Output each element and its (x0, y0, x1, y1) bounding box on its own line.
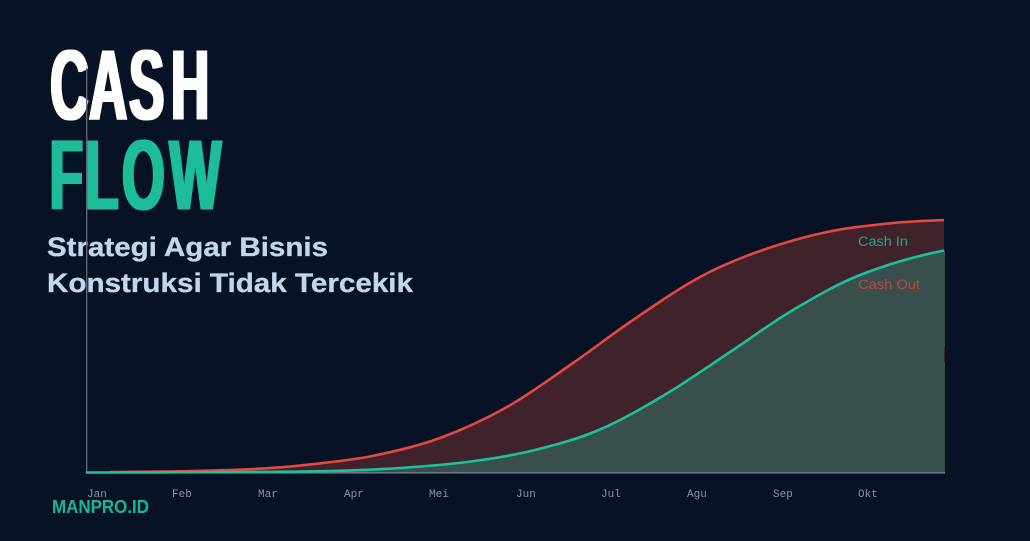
marker: red tick (944, 347, 945, 362)
label: Cash Out: Cash Out (858, 277, 920, 292)
area: cash out (86, 220, 944, 473)
x axis month labels: Jan (87, 489, 107, 501)
x axis month labels: Feb (172, 489, 192, 501)
line: cash in (86, 250, 944, 472)
x axis month labels: Jul (601, 489, 621, 501)
title: Cash Flow: CASH (50, 30, 209, 141)
y axis (86, 68, 87, 473)
logo: MANPRO.ID: MANPRO.ID (52, 497, 149, 517)
label: Cash In: Cash In (858, 234, 908, 249)
x axis month labels (87, 489, 878, 501)
x axis month labels: Agu (687, 489, 707, 501)
area: cash in (86, 250, 945, 473)
x axis month labels: Mar (258, 489, 278, 501)
x axis month labels: Jun (516, 489, 536, 501)
x axis month labels: Sep (773, 489, 793, 501)
x axis month labels: Mei (429, 489, 449, 501)
x axis month labels: Okt (858, 489, 878, 501)
subtitle: Konstruksi Tidak Tercekik (47, 268, 414, 298)
area chart: cash in vs cash out (86, 68, 945, 501)
subtitle: Strategi Agar Bisnis (47, 232, 328, 262)
x axis month labels: Apr (344, 489, 364, 501)
line: cash out (110, 220, 944, 472)
subtitle (47, 232, 414, 298)
title: Cash Flow: FLOW (50, 120, 222, 232)
title: Cash Flow (50, 30, 222, 232)
x axis (86, 472, 945, 474)
